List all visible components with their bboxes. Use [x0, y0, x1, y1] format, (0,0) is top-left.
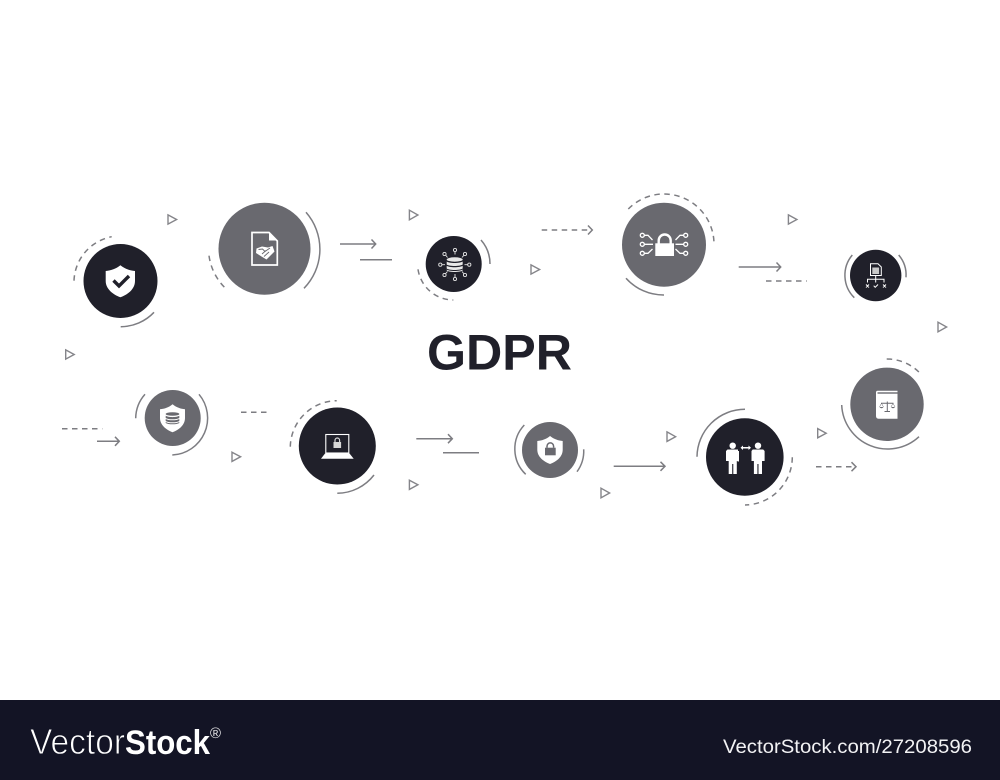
step 1: shield check: [74, 237, 158, 327]
step 4: lock network: [622, 194, 714, 295]
step 10: law book: [842, 359, 924, 449]
icon: database with nodes: [439, 248, 471, 281]
icon: book with scales: [876, 391, 898, 419]
decorative triangle markers: [66, 210, 947, 498]
step 3: database network: [418, 236, 490, 300]
icon: shield with padlock: [537, 436, 563, 464]
step 7: laptop lock: [290, 401, 376, 493]
icon: shield with check: [106, 265, 135, 297]
icon: laptop with padlock: [321, 434, 354, 459]
step 2: agreement document: [209, 203, 320, 295]
arrowhead 2: [588, 226, 592, 234]
title: GDPR: [427, 324, 572, 380]
icon: document tree: [866, 264, 886, 288]
icon: document with handshake: [252, 232, 277, 265]
step 8: shield lock: [515, 422, 584, 478]
arrow: dashed line and arrow left: [62, 429, 119, 446]
icon: two people with arrow: [726, 442, 765, 474]
arrow: solid arrow 4: [416, 434, 479, 453]
arrow: solid arrow 3: [739, 262, 807, 281]
footer bar: [0, 700, 1000, 780]
step 5: document hierarchy: [845, 250, 906, 301]
arrow: solid arrow 5: [614, 462, 665, 471]
footer logo: ®: [210, 725, 221, 742]
arrow: dashed arrow 2: [542, 229, 588, 231]
icon: padlock with circuits: [640, 233, 688, 256]
arrow: solid arrow 1: [340, 240, 392, 260]
footer logo: [30, 721, 221, 762]
dashed connector: [241, 411, 270, 413]
step 6: shield database: [136, 390, 208, 455]
arrow: dashed arrow 6: [816, 462, 856, 471]
footer logo: Stock: [125, 724, 210, 762]
footer logo: Vector: [30, 721, 125, 762]
step 9: two people: [697, 409, 792, 505]
icon: shield with stacked data: [160, 404, 185, 432]
footer image id: VectorStock.com/27208596: [723, 737, 972, 758]
